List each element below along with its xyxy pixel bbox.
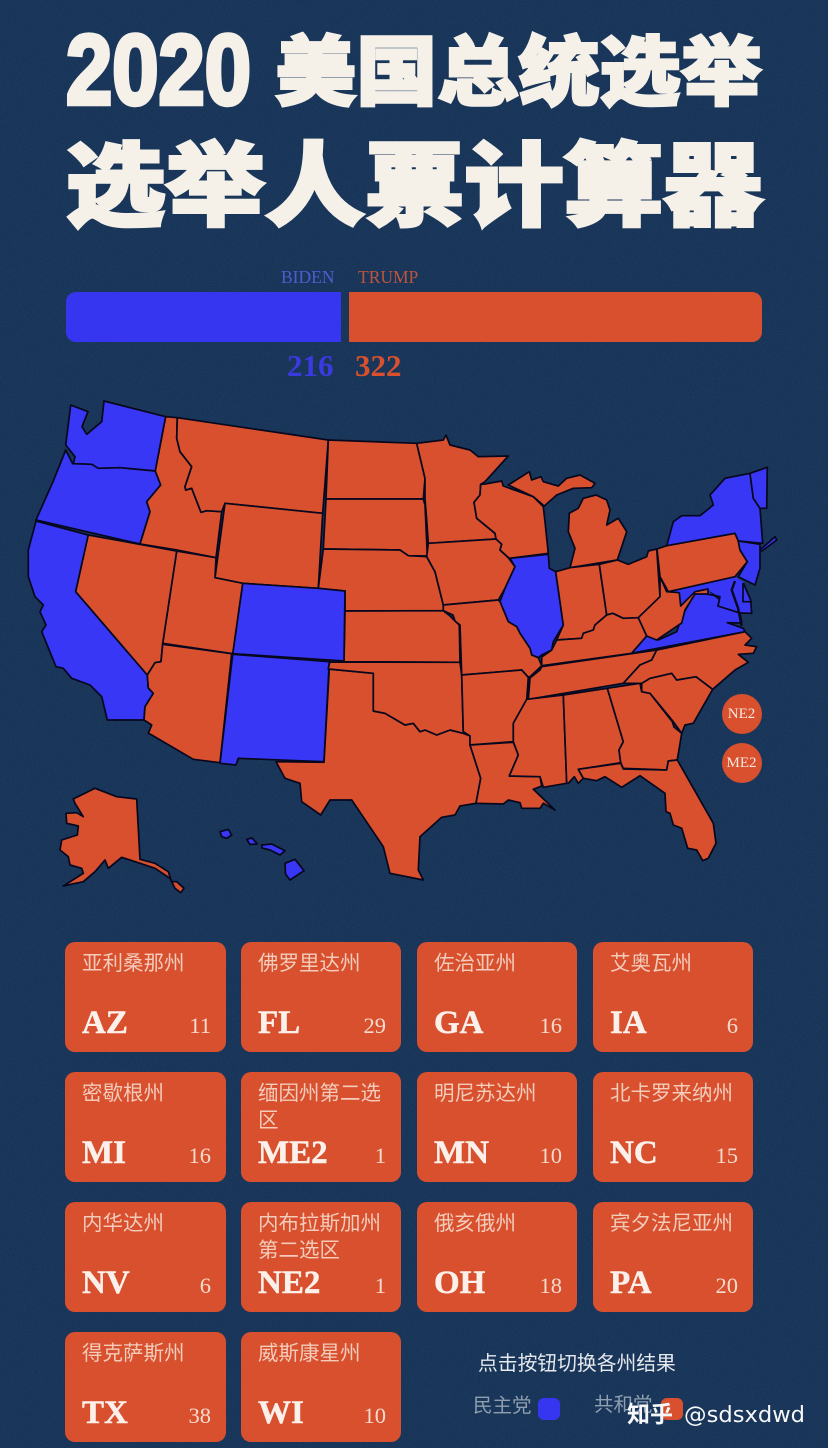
state: NC: [623, 632, 757, 689]
card: Ohio: [417, 1202, 577, 1312]
state: LA: [470, 742, 555, 810]
card: North Carolina: [593, 1072, 753, 1182]
state: MO: [443, 600, 542, 677]
state: HI: [220, 829, 304, 880]
card: Maine 2nd district: ME2: [258, 1135, 328, 1171]
card: North Carolina: NC: [610, 1135, 658, 1171]
state: MS: [509, 695, 567, 787]
card: Pennsylvania: 宾夕法尼亚州: [610, 1212, 733, 1235]
US electoral map: [28, 400, 778, 894]
state: GA: [607, 683, 682, 770]
state: CO: [233, 583, 345, 661]
card: Arizona: 11: [189, 1013, 211, 1038]
card: Florida: [241, 942, 401, 1052]
title: 2020: [66, 14, 251, 125]
state: KS: [344, 611, 460, 662]
card: Minnesota: [417, 1072, 577, 1182]
watermark: 知乎 @sdsxdwd: [627, 1395, 805, 1429]
card: Minnesota: 10: [540, 1143, 562, 1168]
state: WA: [66, 401, 166, 471]
state: MT: [177, 418, 328, 513]
card: Wisconsin: 10: [364, 1403, 386, 1428]
card: Georgia: 佐治亚州: [434, 952, 516, 975]
state: NM: [220, 654, 329, 765]
state: IL: [500, 554, 563, 658]
card: Nevada: [65, 1202, 226, 1312]
card: Florida: FL: [258, 1005, 300, 1041]
card: Ohio: 18: [540, 1273, 562, 1298]
card: Florida: 29: [364, 1013, 386, 1038]
border: Delaware: [743, 583, 752, 602]
card: Iowa: IA: [610, 1005, 647, 1041]
card: Michigan: 密歇根州: [82, 1082, 164, 1105]
state: NE: [318, 549, 443, 611]
legend label: Republicans: 共和党: [594, 1394, 653, 1416]
card: Maine 2nd district: [241, 1072, 401, 1182]
card: Texas: [65, 1332, 226, 1442]
card: Florida: 佛罗里达州: [258, 952, 360, 975]
card: Pennsylvania: PA: [610, 1265, 652, 1301]
state: IN: [556, 564, 607, 640]
state: ND: [326, 440, 425, 499]
state: NJ: [738, 541, 760, 585]
state: MI upper peninsula: [508, 472, 595, 506]
card: Nebraska 2nd district: 内布拉斯加州第二选区: [258, 1212, 381, 1262]
state: VA: [632, 590, 745, 653]
state: MD and DE: [668, 577, 752, 613]
state: NY: [667, 473, 763, 546]
state: WI: [474, 481, 548, 558]
state: FL: [578, 760, 716, 861]
state: UT: [163, 551, 243, 654]
state: SD: [323, 499, 427, 556]
card: Pennsylvania: [593, 1202, 753, 1312]
card: Texas: 得克萨斯州: [82, 1342, 184, 1365]
border: Maryland south coast: [707, 583, 752, 613]
state: New England: [750, 467, 767, 508]
state: TX: [276, 662, 481, 880]
state: MI lower peninsula: [568, 495, 627, 568]
state: SC: [642, 673, 713, 733]
state: AL: [563, 688, 623, 783]
state: OH: [599, 549, 660, 618]
state: AR: [462, 670, 528, 745]
card: Iowa: [593, 942, 753, 1052]
state: Long Island: [760, 537, 777, 551]
title: 美国总统选举: [275, 11, 762, 121]
state: WV: [638, 577, 708, 640]
card: Nebraska 2nd district: [241, 1202, 401, 1312]
card: North Carolina: 15: [716, 1143, 738, 1168]
card: Ohio: 俄亥俄州: [434, 1212, 516, 1235]
title: 选举人票计算器: [66, 113, 763, 245]
card: Michigan: [65, 1072, 226, 1182]
state: IA: [427, 539, 515, 605]
card: Wisconsin: 威斯康星州: [258, 1342, 360, 1365]
state: CA: [28, 521, 153, 720]
card: Maine 2nd district: 1: [375, 1143, 386, 1168]
state: KY: [542, 613, 647, 666]
card: Nevada: 6: [200, 1273, 211, 1298]
card: Iowa: 艾奥瓦州: [610, 952, 692, 975]
card: Michigan: 16: [188, 1143, 211, 1168]
card: Nebraska 2nd district: NE2: [258, 1265, 320, 1301]
card: Nevada: NV: [82, 1265, 130, 1301]
card: Arizona: 亚利桑那州: [82, 952, 184, 975]
state: ID: [140, 417, 222, 558]
Chesapeake Bay: [732, 581, 742, 626]
card: North Carolina: 北卡罗来纳州: [610, 1082, 733, 1105]
card: Arizona: [65, 942, 226, 1052]
legend instruction: 点击按钮切换各州结果: [478, 1353, 676, 1375]
card: Michigan: MI: [82, 1135, 126, 1171]
state: OR: [36, 450, 161, 544]
card: Arizona: AZ: [82, 1005, 128, 1041]
card: Nevada: 内华达州: [82, 1212, 164, 1235]
card: Nebraska 2nd district: 1: [375, 1273, 386, 1298]
card: Georgia: [417, 942, 577, 1052]
electoral vote bar: Trump: [349, 292, 762, 342]
vote count: Biden 216: 216: [287, 348, 334, 383]
state: WY: [215, 503, 323, 588]
card: Wisconsin: [241, 1332, 401, 1442]
card: Wisconsin: WI: [258, 1395, 304, 1431]
state: MN: [417, 435, 508, 543]
card: Minnesota: MN: [434, 1135, 489, 1171]
card: Texas: TX: [82, 1395, 128, 1431]
state: TN: [528, 650, 657, 699]
electoral vote bar: Biden: [66, 292, 341, 342]
card: Ohio: OH: [434, 1265, 485, 1301]
card: Iowa: 6: [727, 1013, 738, 1038]
card: Maine 2nd district: 缅因州第二选区: [258, 1082, 381, 1132]
state: AK: [60, 788, 184, 893]
legend swatch: Democrats: [538, 1398, 560, 1420]
district marker: NE2: NE2: [728, 706, 755, 722]
title: [66, 11, 766, 245]
vote count: Trump 322: 322: [355, 348, 402, 383]
state: NV: [76, 535, 177, 675]
legend swatch: Republicans: [661, 1398, 683, 1420]
card: Texas: 38: [188, 1403, 211, 1428]
card: Georgia: 16: [540, 1013, 562, 1038]
candidate label: Trump: TRUMP: [358, 267, 418, 287]
state: AZ: [144, 644, 232, 763]
district marker: NE2: [722, 694, 762, 734]
card: Pennsylvania: 20: [716, 1273, 738, 1298]
district marker: ME2: [722, 743, 762, 783]
district marker: ME2: ME2: [726, 755, 756, 771]
card: Georgia: GA: [434, 1005, 484, 1041]
state: OK: [328, 662, 463, 735]
state: PA: [657, 533, 747, 592]
legend label: Democrats: 民主党: [473, 1395, 532, 1417]
card: Minnesota: 明尼苏达州: [434, 1082, 536, 1105]
candidate label: Biden: BIDEN: [281, 267, 334, 287]
